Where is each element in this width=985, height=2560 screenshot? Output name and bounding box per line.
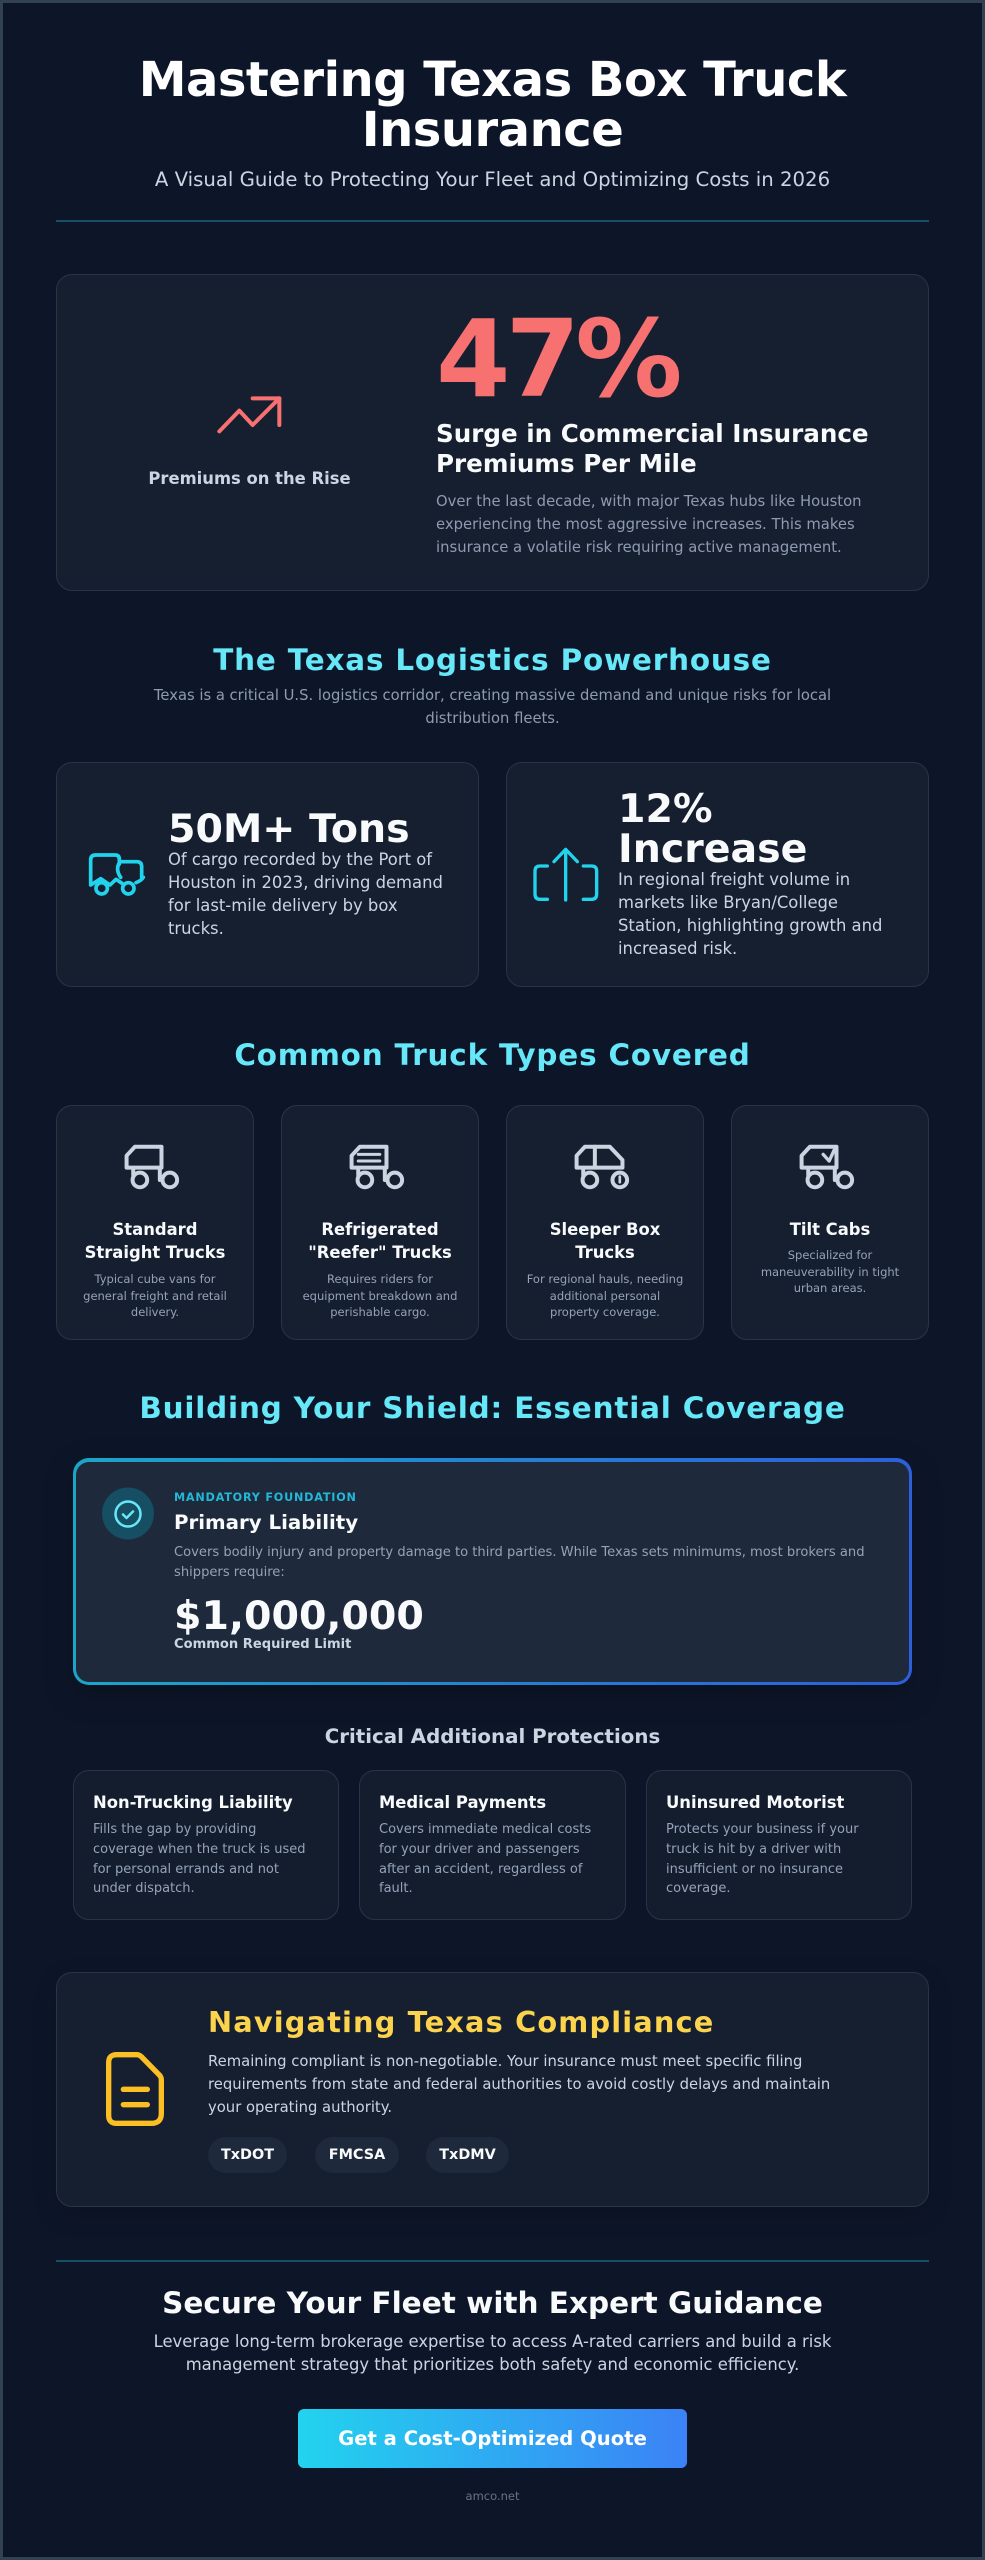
protection text: after an accident, regardless of (379, 1862, 582, 1877)
tag: FMCSA: FMCSA (329, 2147, 385, 2163)
compliance text: requirements from state and federal authorities to avoid costly delays and maintain (208, 2076, 830, 2092)
big stat: 47%: 47% (436, 298, 678, 422)
truck description (303, 1272, 457, 1319)
protection text: coverage when the truck is used (93, 1842, 305, 1857)
panel: primary liability (72, 1458, 912, 1685)
truck description: urban areas. (794, 1281, 866, 1295)
truck description (527, 1272, 683, 1319)
panel: 12% increase (506, 762, 929, 987)
footer source: amco.net (466, 2489, 519, 2503)
tag: TxDOT (208, 2137, 287, 2173)
stat heading (436, 419, 869, 478)
heading: essential coverage: Building Your Shield: Essential Coverage (139, 1391, 846, 1425)
tag: FMCSA (315, 2137, 399, 2173)
truck name: Refrigerated (321, 1220, 439, 1239)
icon: rising trend arrow (217, 396, 282, 434)
stat text: trucks. (168, 919, 224, 938)
stat description (436, 492, 862, 556)
panel: reefer trucks (281, 1105, 479, 1340)
truck description (83, 1272, 227, 1319)
section intro: distribution fleets. (425, 710, 560, 727)
stat description: experiencing the most aggressive increases. This makes (436, 516, 855, 532)
protection text: coverage. (666, 1881, 730, 1896)
coverage amount: $1,000,000 (174, 1593, 424, 1639)
truck description: Typical cube vans for (94, 1272, 216, 1286)
truck description: perishable cargo. (330, 1305, 430, 1319)
panel: non-trucking liability (72, 1770, 339, 1920)
truck description (761, 1248, 899, 1295)
closing text: Leverage long-term brokerage expertise to access A-rated carriers and build a risk (154, 2332, 831, 2351)
stat: 12% increase: 12% (618, 786, 713, 832)
truck name: Tilt Cabs (790, 1220, 870, 1239)
compliance text (208, 2052, 830, 2116)
panel: medical payments (359, 1770, 626, 1920)
protection title: Non-Trucking Liability (93, 1793, 293, 1812)
protection text (93, 1822, 305, 1896)
stat heading: Surge in Commercial Insurance (436, 419, 869, 448)
protection title: Medical Payments (379, 1793, 546, 1812)
title: Mastering Texas Box Truck (139, 52, 846, 108)
icon: trucks (88, 853, 146, 896)
compliance text: Remaining compliant is non-negotiable. Your insurance must meet specific filing (208, 2052, 802, 2070)
eyebrow label: MANDATORY FOUNDATION (174, 1491, 357, 1504)
panel: sleeper box trucks (506, 1105, 704, 1340)
stat: 50M+ tons: 50M+ Tons (168, 806, 410, 852)
protection text: Protects your business if your (666, 1822, 859, 1837)
heading: truck types: Common Truck Types Covered (234, 1038, 751, 1072)
stat: 12% increase (618, 786, 807, 872)
stat heading: Premiums Per Mile (436, 448, 697, 478)
closing text: management strategy that prioritizes both safety and economic efficiency. (186, 2355, 799, 2374)
tag: TxDMV (426, 2137, 509, 2173)
icon: upload arrow (533, 848, 598, 902)
truck description: maneuverability in tight (761, 1264, 899, 1278)
icon: document (106, 2052, 164, 2126)
call to action button: Get a Cost-Optimized Quote (338, 2427, 647, 2450)
truck description: For regional hauls, needing (527, 1272, 683, 1286)
panel: standard straight trucks (56, 1105, 254, 1340)
icon: reefer truck (350, 1144, 404, 1190)
stat text: increased risk. (618, 939, 737, 958)
stat text: Houston in 2023, driving demand (168, 873, 443, 892)
protection text (379, 1822, 591, 1896)
compliance heading: Navigating Texas Compliance (208, 2005, 714, 2039)
truck name: Standard (112, 1220, 197, 1239)
protection text (666, 1822, 859, 1896)
section intro (154, 687, 831, 727)
protection text: truck is hit by a driver with (666, 1842, 841, 1857)
protection text: for personal errands and not (93, 1862, 279, 1877)
subtitle: A Visual Guide to Protecting Your Fleet and Optimizing Costs in 2026 (155, 168, 830, 191)
truck name: Sleeper Box (550, 1220, 660, 1239)
stat text: Station, highlighting growth and (618, 916, 882, 935)
coverage description (174, 1545, 865, 1580)
icon: straight truck (124, 1144, 180, 1190)
truck description: additional personal (550, 1288, 660, 1302)
panel: tilt cabs (731, 1105, 929, 1340)
stat description: insurance a volatile risk requiring active management. (436, 538, 842, 556)
truck description: property coverage. (550, 1305, 660, 1319)
stat text (618, 870, 882, 958)
stat: 12% increase: Increase (618, 826, 807, 872)
truck name (85, 1220, 225, 1262)
closing heading: Secure Your Fleet with Expert Guidance (162, 2286, 823, 2320)
title: Insurance (362, 102, 623, 158)
icon: tilt cab truck (800, 1144, 854, 1190)
coverage description: Covers bodily injury and property damage to third parties. While Texas sets minimums, most brokers and (174, 1545, 865, 1560)
truck description: equipment breakdown and (303, 1288, 457, 1302)
heading: additional protections: Critical Additional Protections (325, 1725, 660, 1748)
tag: TxDOT: TxDOT (221, 2147, 274, 2163)
stat description: Over the last decade, with major Texas hubs like Houston (436, 492, 862, 510)
coverage title: Primary Liability (174, 1511, 358, 1534)
truck description: general freight and retail (83, 1288, 227, 1302)
amount label: Common Required Limit (174, 1637, 351, 1652)
tag: TxDMV: TxDMV (439, 2147, 496, 2163)
coverage description: shippers require: (174, 1565, 285, 1580)
heading: logistics powerhouse: The Texas Logistics Powerhouse (213, 643, 772, 677)
protection text: Fills the gap by providing (93, 1822, 256, 1837)
protection text: fault. (379, 1881, 413, 1896)
protection text: under dispatch. (93, 1881, 195, 1896)
stat text (168, 850, 443, 938)
panel: compliance (56, 1972, 929, 2207)
icon: sleeper truck (574, 1144, 630, 1190)
compliance text: your operating authority. (208, 2098, 392, 2116)
truck name (550, 1220, 660, 1262)
truck name (308, 1220, 452, 1262)
protection text: Covers immediate medical costs (379, 1822, 591, 1837)
stat text: In regional freight volume in (618, 870, 850, 889)
call to action button (298, 2409, 687, 2468)
truck description: Specialized for (788, 1248, 872, 1262)
title (139, 52, 848, 158)
closing text (154, 2332, 832, 2374)
icon: check badge (102, 1488, 154, 1540)
protection title: Uninsured Motorist (666, 1793, 844, 1812)
stat text: for last-mile delivery by box (168, 896, 398, 915)
truck name: "Reefer" Trucks (308, 1243, 452, 1262)
truck name: Straight Trucks (85, 1243, 225, 1262)
truck description: Requires riders for (327, 1272, 433, 1286)
protection text: insufficient or no insurance (666, 1862, 843, 1877)
truck name: Trucks (575, 1243, 635, 1262)
panel: premium surge hero (56, 274, 929, 591)
icon label: Premiums on the Rise (148, 469, 351, 488)
stat text: Of cargo recorded by the Port of (168, 850, 432, 869)
truck description: delivery. (131, 1305, 179, 1319)
panel: 50M+ tons (56, 762, 479, 987)
section intro: Texas is a critical U.S. logistics corridor, creating massive demand and unique risks for local (154, 687, 831, 704)
protection text: for your driver and passengers (379, 1842, 580, 1857)
panel: uninsured motorist (646, 1770, 912, 1920)
stat text: markets like Bryan/College (618, 893, 838, 912)
